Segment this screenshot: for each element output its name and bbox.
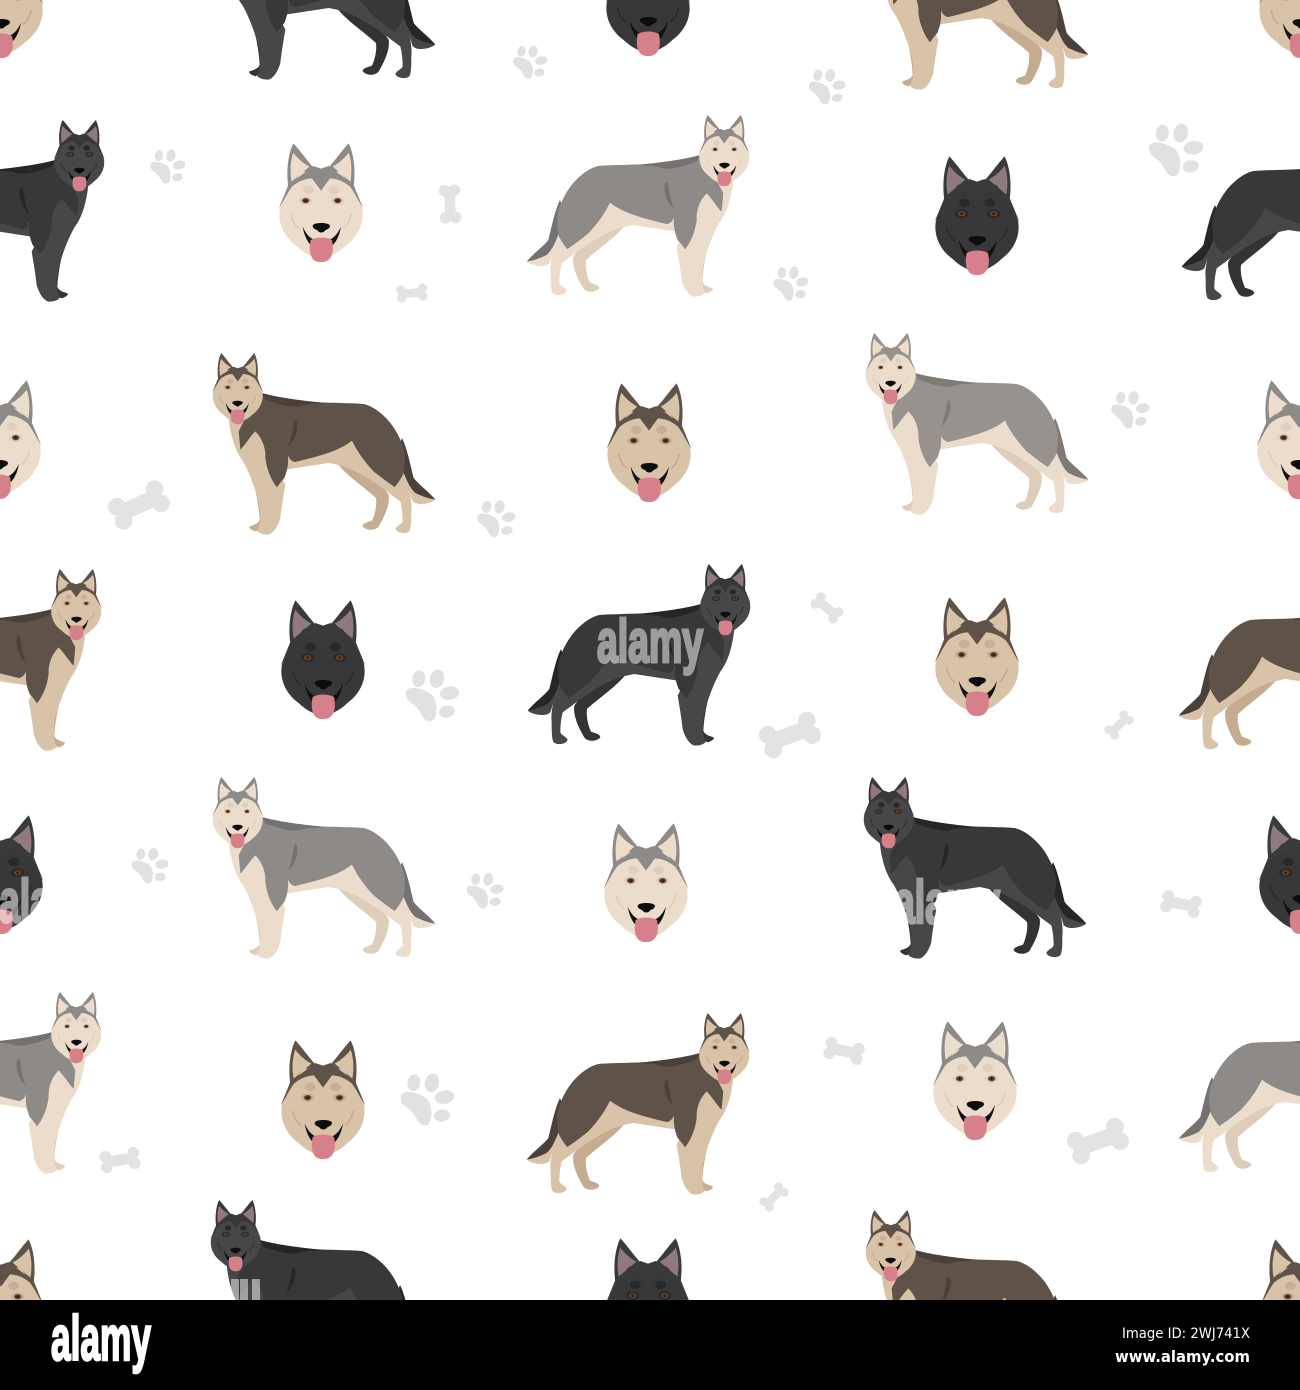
dog: brown right edge	[1179, 569, 1300, 751]
icon: small bone	[396, 283, 428, 303]
face: brown mid right	[935, 597, 1019, 716]
icon: small bone right	[1103, 709, 1135, 741]
face: black upper right	[935, 156, 1019, 275]
dog: grey top centre	[527, 115, 750, 297]
face: grey lower centre	[604, 823, 688, 942]
icon: large bone left	[105, 477, 173, 533]
icon: bone lower left	[99, 1146, 141, 1174]
icon: small bone bottom	[758, 1181, 790, 1213]
dog: brown left	[212, 353, 435, 535]
icon: paw upper left	[150, 149, 186, 184]
face: black top centre	[606, 0, 690, 56]
dog: black left edge	[0, 120, 105, 302]
icon: paw mid left	[477, 499, 516, 537]
face: black bottom centre	[606, 1238, 690, 1357]
dog: black top left	[212, 0, 435, 80]
icon: large paw bottom	[401, 1072, 455, 1125]
dog: grey lower left	[212, 777, 435, 959]
icon: paw centre	[773, 266, 809, 301]
dog: brown bottom right	[865, 1210, 1088, 1390]
icon: bone lower centre	[822, 1036, 866, 1066]
face: top right corner	[1259, 0, 1300, 58]
dog: grey right edge	[1179, 992, 1300, 1174]
face: top left corner	[0, 0, 43, 58]
icon: paw right	[1111, 390, 1150, 428]
face: grey lower right	[933, 1021, 1017, 1140]
watermark text: alamy	[894, 869, 1000, 936]
icon: paw lower left	[132, 847, 169, 883]
icon: paw upper centre right	[809, 68, 846, 104]
dog: black lower right	[863, 777, 1086, 959]
footer logo: alamy	[51, 1304, 151, 1374]
icon: large paw upper right	[1149, 122, 1204, 176]
face: black left edge	[0, 815, 43, 934]
watermark text	[0, 608, 1000, 1300]
watermark text: alamy	[597, 608, 703, 675]
footer band	[0, 1300, 1300, 1390]
dog: black bottom left	[210, 1200, 433, 1382]
dog: brown top right	[865, 0, 1088, 90]
face: bottom right corner	[1261, 1239, 1300, 1358]
face: grey left edge	[0, 380, 41, 499]
image id: Image ID: 2WJ741X	[1122, 1326, 1250, 1342]
dog: grey left edge	[0, 992, 102, 1174]
dog: warm grey right	[865, 333, 1088, 515]
icon: bone vertical	[438, 184, 462, 224]
face: brown lower left	[281, 1040, 365, 1159]
dog: black centre	[528, 564, 751, 746]
icon: bone right	[1159, 889, 1203, 919]
icon: large bone centre	[756, 709, 824, 761]
face: black mid left	[281, 600, 365, 719]
face: bottom left corner	[0, 1239, 43, 1358]
icon: small bone centre	[808, 590, 846, 626]
website: www.alamy.com	[1115, 1347, 1250, 1366]
face: grey right edge	[1257, 380, 1300, 499]
icon: paw prints and bones	[99, 45, 1204, 1213]
face: grey upper left	[279, 143, 363, 262]
dog: brown left edge	[0, 569, 102, 751]
icon: large bone lower right	[1064, 1115, 1132, 1167]
dog: brown lower centre	[527, 1013, 750, 1195]
face: black right edge	[1259, 815, 1300, 934]
icon: large paw mid	[406, 668, 460, 721]
face: brown centre	[607, 383, 691, 502]
icon: paw lower mid	[467, 872, 504, 908]
watermark text: alamy	[0, 868, 105, 935]
icon: paw top centre	[513, 45, 548, 79]
dog: black right edge	[1182, 120, 1300, 302]
